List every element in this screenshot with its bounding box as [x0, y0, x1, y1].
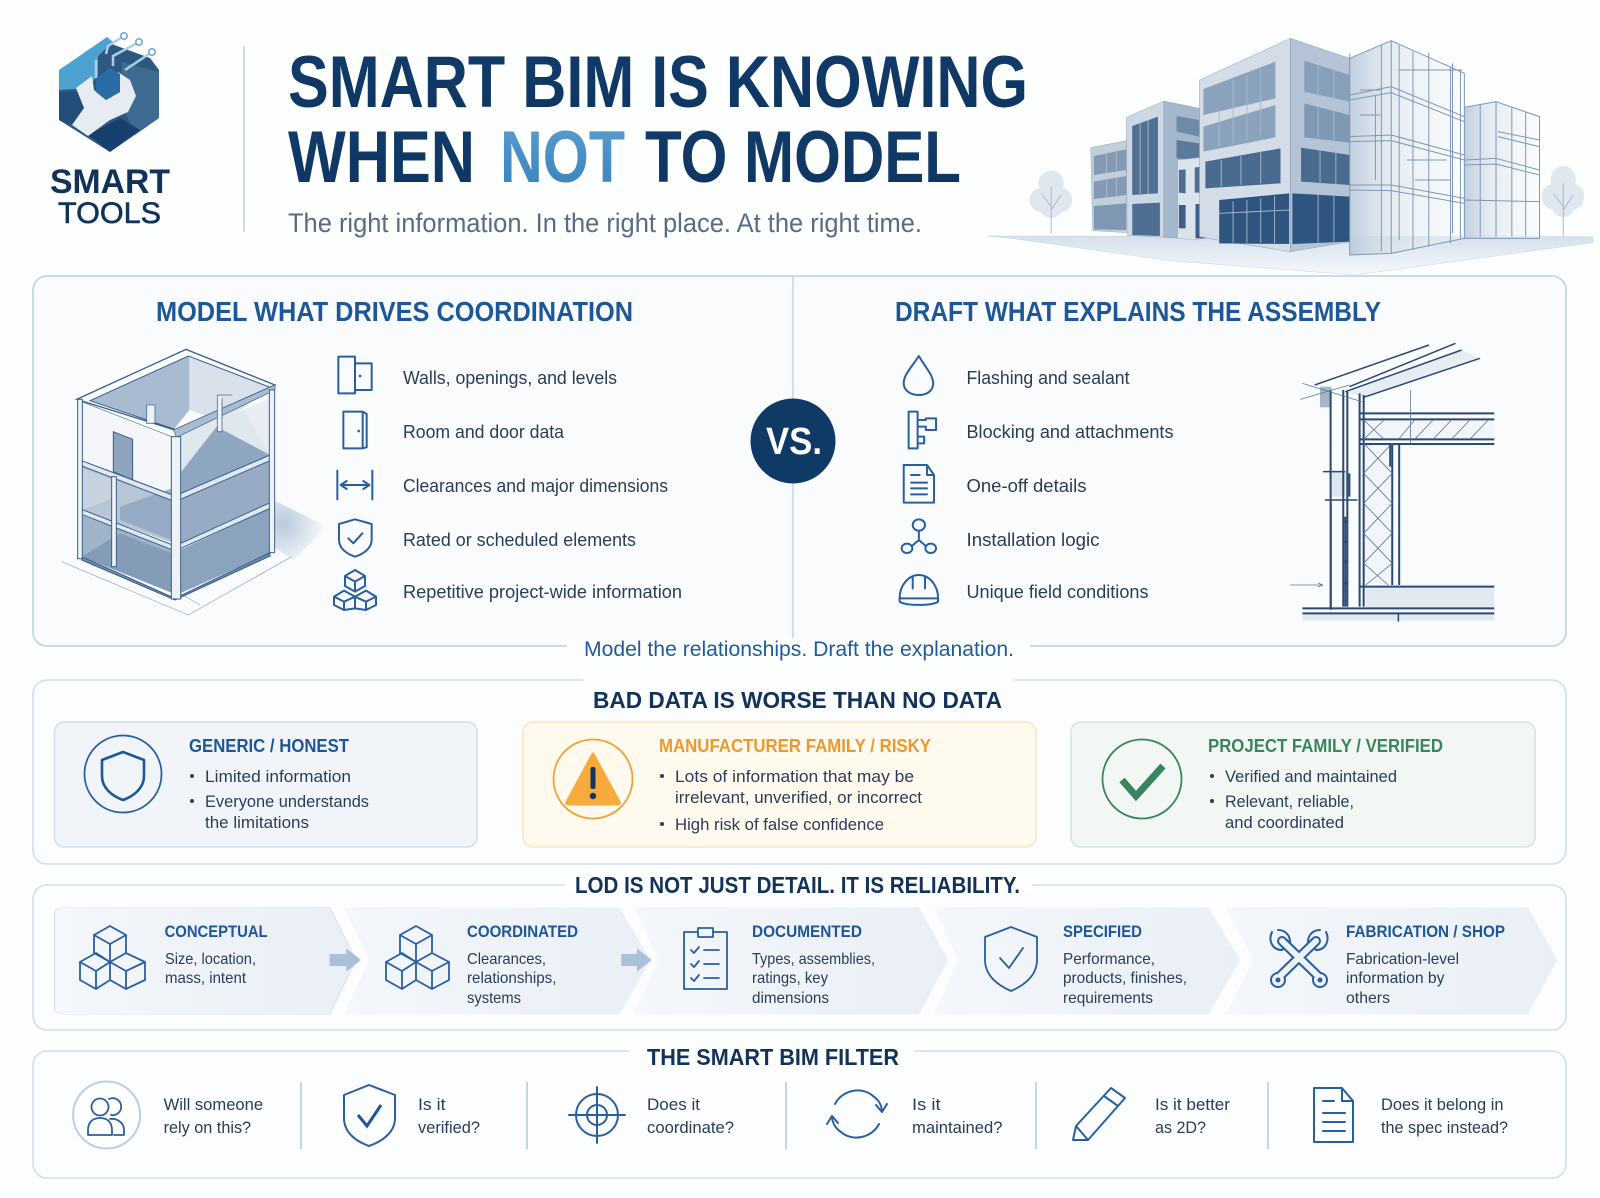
stage: specified: Performance, [1063, 951, 1155, 968]
card: manufacturer: MANUFACTURER FAMILY / RISKY [659, 736, 931, 756]
text: model list labels: Walls, openings, and levels [403, 367, 617, 388]
stage: documented: ratings, key [752, 970, 828, 987]
logo wordmark: TOOLS [58, 197, 161, 230]
logo: Smart Tools [50, 33, 170, 230]
card: project family: Relevant, reliable, [1225, 792, 1354, 811]
question: spec: the spec instead? [1381, 1118, 1508, 1137]
stage: coordinated: systems [467, 990, 521, 1007]
stage: specified: SPECIFIED [1063, 922, 1142, 941]
illustration: isometric building frame [62, 348, 322, 616]
title: WHEN [288, 117, 475, 198]
text: draft list labels: Flashing and sealant [966, 367, 1130, 388]
question: 2D: as 2D? [1155, 1118, 1206, 1137]
text: draft list labels: One-off details [966, 475, 1086, 496]
text: draft list labels: Blocking and attachments [966, 421, 1174, 442]
subtitle: The right information. In the right place. At the right time. [288, 208, 922, 238]
badge: VS: VS. [766, 421, 822, 463]
stage: conceptual [80, 922, 268, 989]
stage: documented: Types, assemblies, [752, 951, 875, 968]
chevrons: LOD stages [54, 907, 1557, 1014]
card: generic [54, 722, 477, 847]
question: rely [73, 1082, 263, 1148]
heading: filter: THE SMART BIM FILTER [647, 1044, 899, 1070]
card: manufacturer: irrelevant, unverified, or incorrect [675, 788, 922, 807]
text: draft list labels: Installation logic [966, 529, 1100, 550]
panel: LOD [33, 872, 1566, 1030]
stage: documented [684, 922, 875, 1007]
heading: draft: DRAFT WHAT EXPLAINS THE ASSEMBLY [895, 296, 1381, 327]
stage: fabrication: others [1346, 990, 1390, 1007]
text: model list labels: Room and door data [403, 421, 565, 442]
stage: specified: requirements [1063, 990, 1153, 1007]
card: generic: Limited information [205, 767, 351, 786]
title: NOT [500, 117, 625, 198]
card: project family: PROJECT FAMILY / VERIFIED [1208, 736, 1443, 756]
heading: bad data: BAD DATA IS WORSE THAN NO DATA [593, 687, 1002, 713]
panel: model vs draft [33, 276, 1566, 658]
question: 2D: Is it better [1155, 1095, 1230, 1114]
icon: hexagon wrench mark [59, 33, 159, 152]
question: verified: verified? [418, 1118, 480, 1137]
question: rely: rely on this? [164, 1118, 251, 1137]
logo wordmark: SMART [50, 163, 170, 201]
question: 2D [1073, 1088, 1230, 1140]
stage: fabrication [1270, 922, 1505, 1007]
card: manufacturer [523, 722, 1036, 847]
question: verified [344, 1085, 480, 1146]
illustration: building solid to wireframe [988, 38, 1594, 275]
stage: specified [985, 922, 1187, 1007]
stage: documented: DOCUMENTED [752, 922, 862, 941]
question: spec: Does it belong in [1381, 1095, 1504, 1114]
stage: conceptual: mass, intent [165, 970, 247, 987]
stage: documented: dimensions [752, 990, 829, 1007]
badge: VS [750, 398, 836, 484]
question: maintained: maintained? [912, 1118, 1002, 1137]
card: generic: Everyone understands [205, 792, 369, 811]
stage: specified: products, finishes, [1063, 970, 1187, 987]
text: model list labels [403, 367, 682, 602]
stage: fabrication: information by [1346, 970, 1444, 987]
text: model list labels: Repetitive project-wide information [403, 581, 682, 602]
stage: fabrication: FABRICATION / SHOP [1346, 922, 1505, 941]
card: manufacturer: Lots of information that may be [675, 767, 914, 786]
stage: fabrication: Fabrication-level [1346, 951, 1459, 968]
card: project family: Verified and maintained [1225, 767, 1397, 786]
panel: smart BIM filter [33, 1044, 1566, 1178]
stage: coordinated: Clearances, [467, 951, 546, 968]
text: model list labels: Clearances and major dimensions [403, 475, 668, 496]
title [288, 42, 1028, 198]
question: maintained: Is it [912, 1095, 941, 1114]
question: rely: Will someone [164, 1095, 263, 1114]
heading: model: MODEL WHAT DRIVES COORDINATION [156, 296, 633, 327]
question: maintained [827, 1090, 1002, 1138]
card: manufacturer: High risk of false confidence [675, 815, 884, 834]
stage: coordinated [386, 922, 578, 1007]
list: draft items [900, 356, 1174, 605]
icon: drop, blocking, document, logic, hard hat [898, 355, 940, 606]
stage: coordinated: relationships, [467, 970, 556, 987]
callout: model vs draft: Model the relationships. Draft the explanation. [584, 638, 1014, 661]
card: generic: the limitations [205, 813, 309, 832]
card: generic: GENERIC / HONEST [189, 736, 349, 756]
stage: conceptual: CONCEPTUAL [165, 922, 268, 941]
panel: bad data [33, 674, 1566, 864]
list: model items [334, 357, 682, 610]
question: spec [1314, 1088, 1508, 1142]
icon: wall and opening [332, 356, 377, 611]
title: SMART BIM IS KNOWING [288, 42, 1028, 123]
text: draft list labels: Unique field conditions [966, 581, 1148, 602]
question: coordinate [569, 1087, 734, 1143]
text: model list labels: Rated or scheduled elements [403, 529, 636, 550]
logo wordmark [50, 163, 170, 230]
title: TO MODEL [645, 117, 961, 198]
card: project family: and coordinated [1225, 813, 1344, 832]
text: draft list labels [966, 367, 1174, 602]
question: coordinate: Does it [647, 1095, 700, 1114]
question: verified: Is it [418, 1095, 446, 1114]
question: coordinate: coordinate? [647, 1118, 734, 1137]
heading: LOD: LOD IS NOT JUST DETAIL. IT IS RELIABILITY. [575, 872, 1020, 898]
stage: conceptual: Size, location, [165, 951, 256, 968]
illustration: wall section detail [1290, 342, 1494, 622]
stage: coordinated: COORDINATED [467, 922, 578, 941]
card: project family [1071, 722, 1535, 847]
